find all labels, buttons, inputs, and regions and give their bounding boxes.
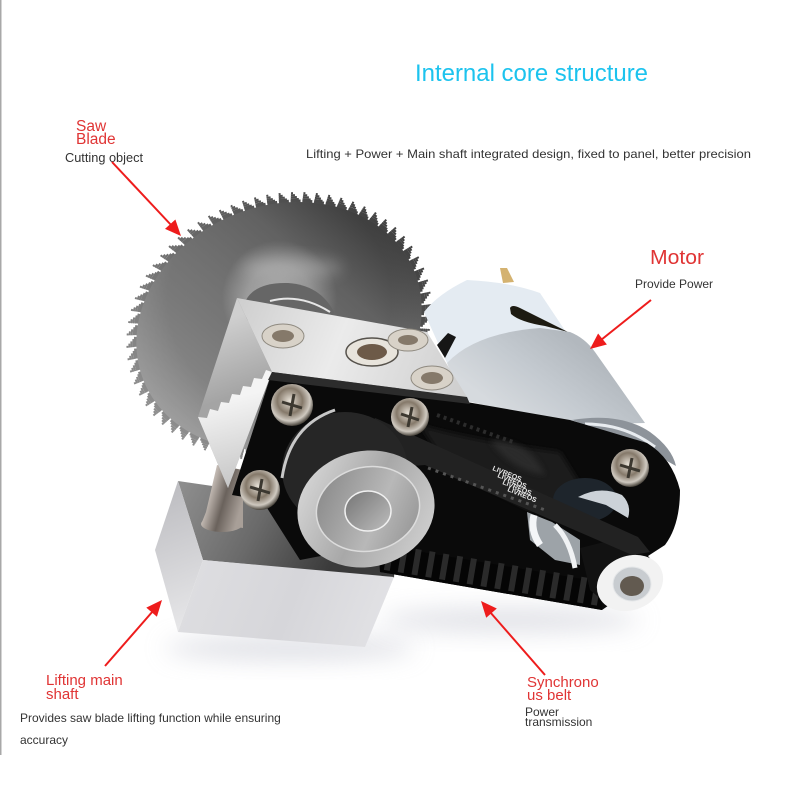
black plate highlight: [420, 425, 590, 510]
belt printing: LIVREOS: [496, 472, 528, 490]
arrow to lifting block: [105, 600, 162, 666]
side face of aluminum bracket: [198, 298, 272, 488]
saw blade: [87, 148, 471, 504]
screw: [271, 384, 313, 426]
page edge line: [0, 0, 2, 755]
guide rod: [201, 465, 243, 532]
saw blade reflection: [198, 370, 272, 488]
motor: [424, 268, 676, 466]
lifting main shaft description: Provides saw blade lifting function while ensuring: [20, 711, 281, 725]
title: Internal core structure: [415, 60, 648, 87]
arrow to motor: [590, 300, 651, 349]
inner belt teeth: [428, 468, 548, 511]
lifting main shaft label: Lifting main: [46, 672, 123, 689]
black belt bracket: [232, 372, 680, 610]
arrow to belt: [481, 601, 545, 675]
screw: [611, 449, 649, 487]
saw blade label: Saw: [76, 118, 107, 135]
belt printing: LIVREOS: [501, 479, 533, 497]
motor side clip: [437, 333, 456, 358]
end cap with hex socket: [588, 545, 672, 621]
callout: lifting main shaft: accuracy: [20, 733, 68, 747]
blade hub: [246, 283, 334, 330]
motor can: [447, 328, 645, 425]
plate bolt: [411, 366, 453, 390]
silver spacer and spring: [527, 478, 629, 568]
floor shadows: [165, 608, 640, 660]
front belt strap: [360, 418, 650, 555]
lower toothed belt: [380, 545, 602, 610]
arrow to saw blade: [112, 162, 181, 236]
phillips screws: [240, 384, 649, 510]
block top face: [178, 481, 395, 578]
center socket bolt: [346, 338, 398, 366]
motor label: Motor: [650, 247, 704, 269]
upper belt teeth: [437, 415, 513, 442]
motor terminal: [500, 268, 514, 283]
top plate: [237, 298, 467, 397]
synchronous belt label: Synchrono: [527, 674, 599, 691]
screw: [391, 398, 429, 436]
small drive teeth: [580, 540, 640, 600]
callout: lifting main shaft: [20, 600, 281, 747]
block left face: [155, 481, 203, 632]
lower lifting block: [155, 465, 395, 647]
callout: motor: [590, 247, 713, 349]
callout: saw blade: [65, 118, 181, 236]
belt printing: [491, 465, 538, 504]
saw blade description: Cutting object: [65, 151, 144, 165]
callout: lifting main shaft: shaft: [46, 686, 79, 703]
motor description: Provide Power: [635, 277, 713, 291]
belt printing: LIVREOS: [491, 465, 523, 483]
rear pulley: [282, 410, 408, 528]
product photo: saw blade assembly: [87, 148, 680, 647]
callout: saw blade: Blade: [76, 131, 116, 148]
block front face: [178, 560, 394, 647]
callout: synchronous belt: transmission: [525, 715, 592, 729]
plate bolt: [388, 329, 428, 351]
motor pulley band: [572, 418, 676, 466]
callout: synchronous belt: us belt: [527, 687, 572, 704]
motor rear housing: [424, 280, 568, 363]
synchronous belt description: Power: [525, 705, 559, 719]
plate face and bolts: [237, 298, 470, 404]
front pulley flange: [286, 438, 446, 580]
motor slot: [510, 306, 568, 332]
screw: [240, 470, 280, 510]
callout: synchronous belt: [481, 601, 599, 729]
belt printing: LIVREOS: [506, 486, 538, 504]
plate bolt: [262, 324, 304, 348]
subtitle: Lifting + Power + Main shaft integrated design, fixed to panel, better precision: [306, 147, 751, 161]
